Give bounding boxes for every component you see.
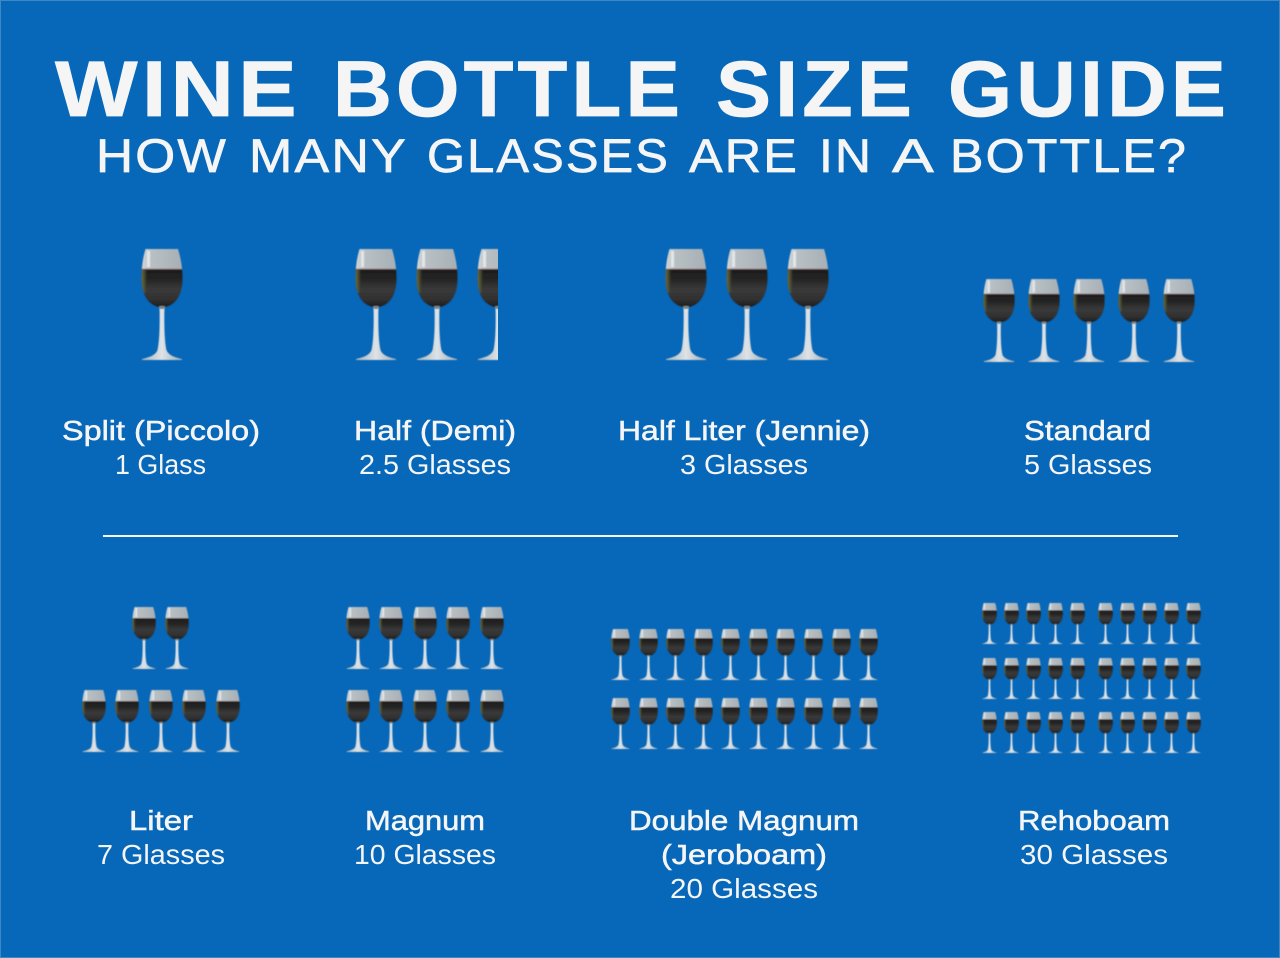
icon: 1 wine glass: [141, 249, 183, 360]
label: 20 glasses: 20 Glasses: [670, 873, 818, 904]
icon: 20 wine glasses: [611, 629, 878, 749]
subtitle: A: [892, 129, 935, 182]
icon: 3 wine glasses: [665, 249, 829, 360]
icon: 5 wine glasses: [983, 279, 1195, 362]
label: 7 glasses: 7 Glasses: [97, 839, 225, 870]
panel: standard: [983, 279, 1195, 480]
icon: 30 wine glasses: [982, 603, 1201, 753]
label: 5 glasses: 5 Glasses: [1024, 449, 1152, 480]
subtitle: MANY: [249, 129, 407, 182]
label: magnum: Magnum: [365, 805, 485, 836]
label: 30 glasses: 30 Glasses: [1020, 839, 1168, 870]
subtitle: BOTTLE?: [950, 129, 1188, 182]
panel: magnum: [346, 607, 504, 870]
label: split: Split (Piccolo): [62, 415, 260, 446]
subtitle: GLASSES: [427, 129, 670, 182]
label: half: Half (Demi): [354, 415, 516, 446]
label: standard: Standard: [1024, 415, 1151, 446]
panel: half liter: [618, 249, 870, 480]
label: double magnum: Double Magnum: [629, 805, 859, 836]
panel: double magnum: [611, 629, 878, 904]
subtitle: IN: [819, 129, 873, 182]
icon: 2.5 wine glasses: [354, 248, 498, 361]
label: rehoboam: Rehoboam: [1018, 805, 1170, 836]
label: 10 glasses: 10 Glasses: [354, 839, 496, 870]
panel: rehoboam: [982, 603, 1201, 870]
title: GUIDE: [948, 44, 1230, 133]
title: SIZE: [716, 44, 916, 133]
subtitle: HOW: [96, 129, 228, 182]
label: half liter: Half Liter (Jennie): [618, 415, 870, 446]
label: 1 glass: 1 Glass: [115, 449, 206, 480]
subtitle: ARE: [689, 129, 799, 182]
icon: 7 wine glasses: [82, 607, 240, 752]
label: 2.5 glasses: 2.5 Glasses: [359, 449, 511, 480]
title: WINE: [55, 44, 301, 133]
title: BOTTLE: [333, 44, 684, 133]
panel: half: [354, 249, 519, 480]
label: 3 glasses: 3 Glasses: [680, 449, 808, 480]
label: jeroboam: (Jeroboam): [661, 839, 827, 870]
panel: liter: [82, 607, 240, 870]
panel: split: [62, 249, 260, 480]
divider: [103, 535, 1178, 537]
label: liter: Liter: [129, 805, 193, 836]
icon: 10 wine glasses: [346, 607, 504, 752]
